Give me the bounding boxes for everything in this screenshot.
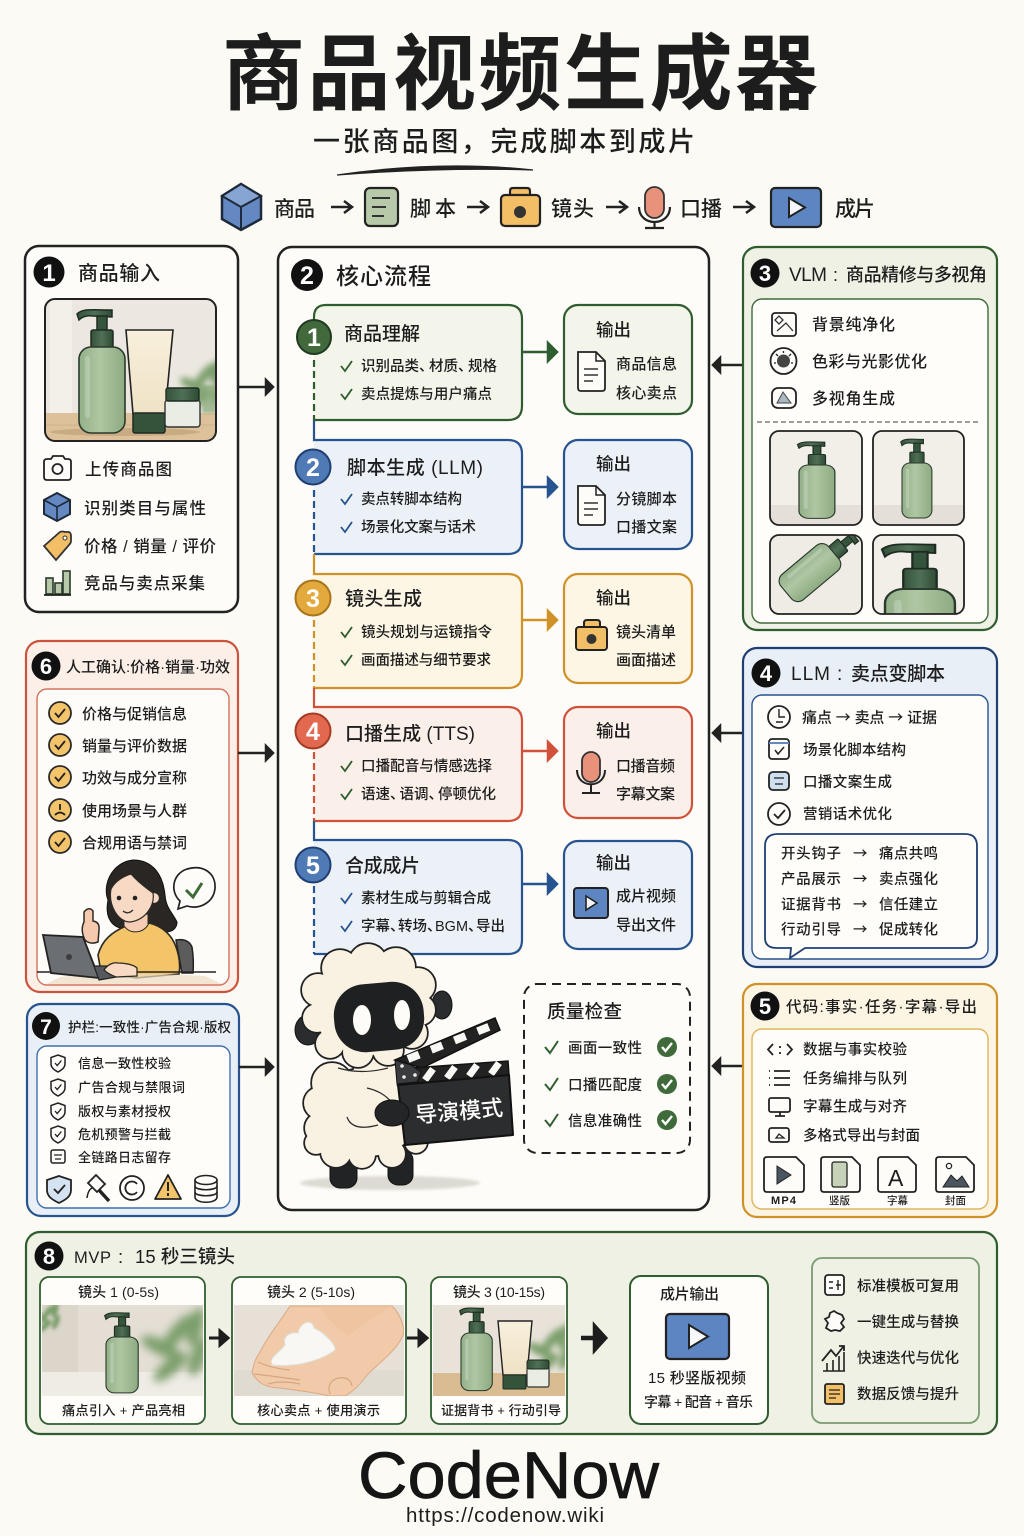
benefit: template: 标准模板可复用 bbox=[857, 1277, 959, 1295]
list item: 价格与促销信息 bbox=[82, 705, 187, 723]
step 5: final composition bbox=[296, 821, 522, 954]
shot 1 image bbox=[42, 1305, 203, 1396]
icon: microphone bbox=[639, 187, 670, 228]
output 5: 成片视频 bbox=[616, 888, 676, 905]
badge 1 bbox=[34, 256, 64, 288]
check item: 信息准确性 bbox=[568, 1112, 642, 1130]
step number bbox=[296, 580, 330, 616]
panel 4: LLM selling points to script bbox=[743, 648, 997, 967]
file icon: cover: 封面 bbox=[945, 1194, 966, 1207]
product photo bbox=[45, 299, 228, 441]
list item: 销量与评价数据 bbox=[82, 738, 187, 755]
flow label: script: 脚本 bbox=[410, 198, 456, 221]
thumbnail: front view bbox=[770, 431, 862, 525]
shot 1: 痛点引入 + 产品亮相 bbox=[62, 1402, 185, 1418]
benefit: feedback bbox=[825, 1384, 959, 1404]
arrow: step 1 to output bbox=[522, 343, 557, 361]
step number: 2 bbox=[306, 454, 320, 482]
badge 7: 7 bbox=[40, 1016, 52, 1039]
checklist item: 语速、语调、停顿优化 bbox=[361, 786, 496, 803]
heading: : bbox=[118, 1246, 123, 1267]
flow label: product: 商品 bbox=[274, 198, 315, 221]
flow label: voice: 口播 bbox=[680, 198, 722, 221]
heading: 商品精修与多视角 bbox=[846, 265, 987, 285]
heading: 商品输入 bbox=[78, 262, 160, 285]
check item bbox=[545, 1110, 677, 1130]
speech bubble: script mapping: → bbox=[853, 918, 868, 940]
panel 8: MVP three shots bbox=[26, 1232, 997, 1434]
arrow: step 3 to output bbox=[522, 611, 557, 629]
list item: 背景纯净化 bbox=[812, 316, 895, 334]
shot 3 image bbox=[433, 1305, 575, 1396]
list item bbox=[51, 1126, 171, 1143]
arrow: shot 2 to shot 3 bbox=[407, 1331, 427, 1345]
output 5: 导出文件 bbox=[616, 916, 676, 934]
list item bbox=[51, 1103, 171, 1120]
arrow: panel 5 to core flow bbox=[713, 1059, 743, 1073]
thumbnail: side view bbox=[873, 431, 964, 525]
output 3: 画面描述 bbox=[616, 652, 676, 669]
panel 3: VLM retouch and multi-view bbox=[742, 246, 998, 632]
list item bbox=[51, 1055, 171, 1072]
output 2: 口播文案 bbox=[616, 518, 677, 536]
step 2: script generation bbox=[296, 420, 522, 554]
website url: https://codenow.wiki bbox=[406, 1504, 604, 1527]
subtitle underline swoosh bbox=[337, 166, 533, 175]
checklist item: 卖点转脚本结构 bbox=[361, 491, 462, 508]
benefit: iterate bbox=[822, 1346, 959, 1371]
list item: price: 价格 / 销量 / 评价 bbox=[84, 537, 216, 556]
step number bbox=[296, 450, 330, 484]
benefit: template bbox=[825, 1275, 959, 1295]
output 3 bbox=[564, 574, 692, 683]
panel 6: human confirmation bbox=[26, 641, 238, 992]
badge 3 bbox=[750, 258, 780, 288]
badge 6 bbox=[32, 652, 60, 680]
checklist item: 场景化文案与话术 bbox=[361, 518, 476, 536]
step title: 商品理解 bbox=[344, 323, 420, 345]
list item bbox=[49, 831, 187, 853]
list item: 使用场景与人群 bbox=[82, 803, 187, 820]
output 4: 口播音频 bbox=[616, 758, 675, 775]
arrow bbox=[467, 201, 488, 213]
list item: 数据与事实校验 bbox=[803, 1040, 908, 1058]
final output box: 15 秒竖版视频 bbox=[648, 1370, 746, 1387]
benefit: one click bbox=[825, 1311, 960, 1331]
step 1: product understanding bbox=[297, 305, 522, 420]
list item: upload bbox=[44, 456, 172, 480]
icon: cube bbox=[222, 184, 261, 230]
speech bubble: script mapping: 信任建立 bbox=[879, 896, 938, 914]
arrow: step 4 to output bbox=[522, 742, 557, 760]
step 4: voice generation bbox=[296, 688, 522, 821]
output 5 bbox=[564, 841, 692, 949]
file icon: vertical bbox=[821, 1157, 860, 1207]
list item: competitor data: 竞品与卖点采集 bbox=[84, 574, 206, 593]
list item bbox=[769, 739, 906, 759]
shot 1: 镜头 1 (0-5s) bbox=[78, 1284, 159, 1300]
step number: 4 bbox=[306, 718, 320, 746]
step number bbox=[296, 848, 330, 882]
step number: 1 bbox=[307, 324, 321, 352]
panel 5: code bbox=[743, 984, 997, 1217]
step number: 3 bbox=[306, 585, 320, 613]
heading: 核心流程 bbox=[336, 263, 431, 289]
badge 5 bbox=[750, 992, 780, 1020]
list item: competitor data bbox=[44, 571, 206, 595]
list item: 口播文案生成 bbox=[803, 773, 892, 791]
heading: LLM bbox=[791, 664, 830, 685]
output 5: 输出 bbox=[596, 853, 631, 873]
speech bubble: script mapping: 产品展示 bbox=[781, 871, 841, 888]
badge 2 bbox=[291, 259, 323, 291]
speech bubble: script mapping: 行动引导 bbox=[781, 922, 841, 938]
badge 5: 5 bbox=[759, 994, 771, 1019]
output 1: 输出 bbox=[596, 320, 631, 340]
file icon: MP4 bbox=[764, 1157, 804, 1207]
list item: 多格式导出与封面 bbox=[803, 1128, 920, 1144]
list item bbox=[772, 388, 895, 408]
heading: : bbox=[833, 265, 838, 285]
list item: 全链路日志留存 bbox=[78, 1150, 171, 1165]
file icon: subtitle: 字幕 bbox=[887, 1194, 908, 1207]
file icon: vertical: 竖版 bbox=[829, 1194, 850, 1207]
badge 8: 8 bbox=[43, 1244, 55, 1269]
speech bubble: script mapping: 开头钩子 bbox=[781, 846, 841, 862]
list item: price bbox=[44, 532, 216, 560]
list item: 多视角生成 bbox=[812, 390, 895, 408]
arrow bbox=[331, 201, 352, 213]
title: 商品视频生成器 bbox=[222, 28, 818, 121]
list item: 痛点 → 卖点 → 证据 bbox=[802, 706, 937, 728]
badge 4: 4 bbox=[760, 661, 773, 686]
checklist item: 画面描述与细节要求 bbox=[361, 652, 492, 669]
thumbnail: pump close-up bbox=[872, 534, 965, 615]
step title: 脚本生成 (LLM) bbox=[347, 457, 483, 479]
checklist item: 卖点提炼与用户痛点 bbox=[361, 386, 492, 403]
output 2: 输出 bbox=[596, 454, 631, 474]
arrow: panel 1 to core flow bbox=[238, 380, 273, 394]
flow label: final: 成片 bbox=[835, 198, 875, 221]
shot 2 bbox=[232, 1277, 406, 1424]
icon: play bbox=[771, 188, 821, 227]
list item bbox=[49, 766, 187, 788]
output 1: 商品信息 bbox=[616, 355, 677, 373]
list item bbox=[769, 772, 892, 791]
badge 7 bbox=[32, 1012, 60, 1040]
list item: 危机预警与拦截 bbox=[78, 1127, 171, 1142]
list item: 任务编排与队列 bbox=[803, 1070, 907, 1088]
step number: 5 bbox=[306, 852, 320, 880]
speech bubble: script mapping bbox=[765, 834, 977, 958]
step number bbox=[296, 714, 330, 748]
list item bbox=[49, 799, 187, 821]
subtitle: 一张商品图，完成脚本到成片 bbox=[313, 127, 695, 157]
output 3: 镜头清单 bbox=[616, 623, 676, 641]
checklist item: 识别品类、材质、规格 bbox=[361, 358, 497, 375]
badge 3: 3 bbox=[759, 261, 771, 286]
shot 3 bbox=[431, 1277, 575, 1424]
check item bbox=[545, 1037, 677, 1057]
heading: VLM bbox=[789, 265, 827, 286]
list item: recognise bbox=[44, 493, 206, 521]
arrow: panel 6 to core flow bbox=[238, 746, 273, 760]
final output box: 字幕 + 配音 + 音乐 bbox=[644, 1394, 753, 1410]
benefit: one click: 一键生成与替换 bbox=[857, 1313, 960, 1331]
arrow: shots to output bbox=[581, 1327, 605, 1349]
icon: database bbox=[195, 1176, 217, 1202]
list item: upload: 上传商品图 bbox=[85, 460, 172, 479]
final output box bbox=[630, 1276, 768, 1424]
speech bubble: script mapping: 促成转化 bbox=[879, 922, 938, 938]
process flow row bbox=[222, 184, 875, 230]
file icon: subtitle bbox=[878, 1157, 916, 1207]
icon: copyright bbox=[120, 1176, 144, 1200]
output 2 bbox=[564, 440, 692, 549]
output 2: 分镜脚本 bbox=[616, 490, 677, 508]
checklist item: 口播配音与情感选择 bbox=[361, 758, 492, 775]
benefit: iterate: 快速迭代与优化 bbox=[857, 1350, 959, 1367]
output 1: 核心卖点 bbox=[616, 384, 677, 402]
output 4 bbox=[564, 707, 692, 818]
clapperboard: 导演模式 bbox=[414, 1095, 504, 1128]
mascot: sheep director bbox=[295, 944, 513, 1190]
benefit: feedback: 数据反馈与提升 bbox=[857, 1386, 959, 1403]
list item: recognise: 识别类目与属性 bbox=[84, 499, 206, 518]
list item: 合规用语与禁词 bbox=[82, 835, 187, 852]
shot 3: 证据背书 + 行动引导 bbox=[441, 1403, 561, 1418]
shot 2: 核心卖点 + 使用演示 bbox=[257, 1402, 380, 1418]
checklist item: 镜头规划与运镜指令 bbox=[361, 623, 492, 641]
shot 1 bbox=[32, 1277, 212, 1424]
arrow: step 2 to output bbox=[522, 478, 557, 496]
icon: play bbox=[666, 1314, 729, 1359]
speech bubble: script mapping: 证据背书 bbox=[781, 896, 841, 914]
file icon: MP4: MP4 bbox=[771, 1195, 797, 1207]
list item bbox=[49, 702, 187, 724]
list item: 信息一致性校验 bbox=[78, 1056, 171, 1071]
output 4: 字幕文案 bbox=[616, 785, 675, 803]
badge 8 bbox=[34, 1242, 64, 1270]
shot 2 image bbox=[234, 1305, 404, 1396]
heading: MVP bbox=[74, 1249, 111, 1267]
icon: shield bbox=[47, 1176, 71, 1203]
badge 1: 1 bbox=[42, 260, 56, 287]
speech bubble: script mapping: → bbox=[853, 842, 868, 864]
file icon: subtitle: A bbox=[888, 1165, 904, 1191]
checklist item: 素材生成与剪辑合成 bbox=[361, 890, 491, 907]
badge 6: 6 bbox=[40, 654, 52, 679]
speech bubble: script mapping: → bbox=[853, 868, 868, 889]
file icon: cover bbox=[936, 1157, 974, 1207]
heading: 护栏:一致性·广告合规·版权 bbox=[68, 1019, 232, 1035]
benefits box bbox=[812, 1258, 979, 1423]
thumbnail: lying view bbox=[769, 534, 863, 615]
list item bbox=[49, 734, 187, 756]
heading: 代码:事实·任务·字幕·导出 bbox=[786, 997, 977, 1016]
list item: 版权与素材授权 bbox=[78, 1104, 171, 1119]
shot 2: 镜头 2 (5-10s) bbox=[267, 1284, 355, 1300]
check item bbox=[545, 1074, 677, 1094]
flow label: shot: 镜头 bbox=[551, 198, 594, 221]
badge 2: 2 bbox=[300, 262, 314, 290]
step title: 口播生成 (TTS) bbox=[345, 723, 475, 745]
speech bubble: script mapping: → bbox=[853, 894, 868, 914]
speech bubble: script mapping: 痛点共鸣 bbox=[879, 846, 938, 862]
icon: gavel bbox=[87, 1175, 109, 1201]
panel 1: product input bbox=[25, 246, 238, 612]
list item: 营销话术优化 bbox=[803, 805, 892, 823]
check item: 口播匹配度 bbox=[568, 1077, 642, 1094]
heading: : bbox=[837, 664, 842, 685]
arrow: step 5 to output bbox=[522, 875, 557, 893]
checklist item: 字幕、转场、BGM、导出 bbox=[361, 917, 505, 935]
clapperboard bbox=[395, 1018, 513, 1145]
arrow: panel 4 to core flow bbox=[713, 726, 743, 740]
list item bbox=[768, 803, 892, 825]
step 3: shot generation bbox=[296, 554, 522, 688]
arrow bbox=[733, 201, 754, 213]
icon: script bbox=[365, 188, 398, 226]
check item: 画面一致性 bbox=[568, 1040, 642, 1057]
heading: 人工确认:价格·销量·功效 bbox=[66, 659, 230, 676]
list item: 字幕生成与对齐 bbox=[803, 1098, 908, 1116]
arrow: shot 1 to shot 2 bbox=[209, 1331, 228, 1345]
list item: 功效与成分宣称 bbox=[82, 770, 187, 787]
final output box: 成片输出 bbox=[660, 1286, 719, 1303]
arrow bbox=[606, 201, 627, 213]
panel 7: guardrails bbox=[27, 1004, 239, 1216]
panel 2: core process bbox=[278, 247, 709, 1210]
list item bbox=[770, 348, 927, 374]
heading: 卖点变脚本 bbox=[851, 663, 945, 685]
step number bbox=[297, 320, 331, 354]
badge 4 bbox=[752, 658, 780, 688]
icon: warning bbox=[155, 1175, 181, 1199]
list item bbox=[772, 313, 895, 336]
arrow: panel 7 to core flow bbox=[239, 1060, 273, 1074]
quality check box bbox=[524, 984, 690, 1153]
step title: 合成成片 bbox=[345, 855, 420, 877]
list item: 色彩与光影优化 bbox=[812, 353, 927, 371]
output 3: 输出 bbox=[596, 588, 631, 608]
output 1 bbox=[564, 305, 692, 414]
logo: CodeNow: CodeNow bbox=[358, 1438, 659, 1512]
output 4: 输出 bbox=[596, 721, 631, 741]
list item bbox=[768, 1040, 908, 1058]
shot 3: 镜头 3 (10-15s) bbox=[453, 1284, 545, 1300]
heading: 15 秒三镜头 bbox=[135, 1246, 235, 1267]
arrow: panel 3 to core flow bbox=[713, 358, 743, 372]
illustration: woman with laptop bbox=[37, 860, 222, 984]
list item: 场景化脚本结构 bbox=[803, 742, 906, 759]
list item bbox=[769, 1098, 908, 1116]
speech bubble: script mapping: 卖点强化 bbox=[879, 871, 938, 888]
step title: 镜头生成 bbox=[345, 588, 422, 610]
list item: 广告合规与禁限词 bbox=[78, 1080, 185, 1095]
quality heading: 质量检查 bbox=[547, 1001, 622, 1022]
icon: camera bbox=[501, 188, 540, 226]
